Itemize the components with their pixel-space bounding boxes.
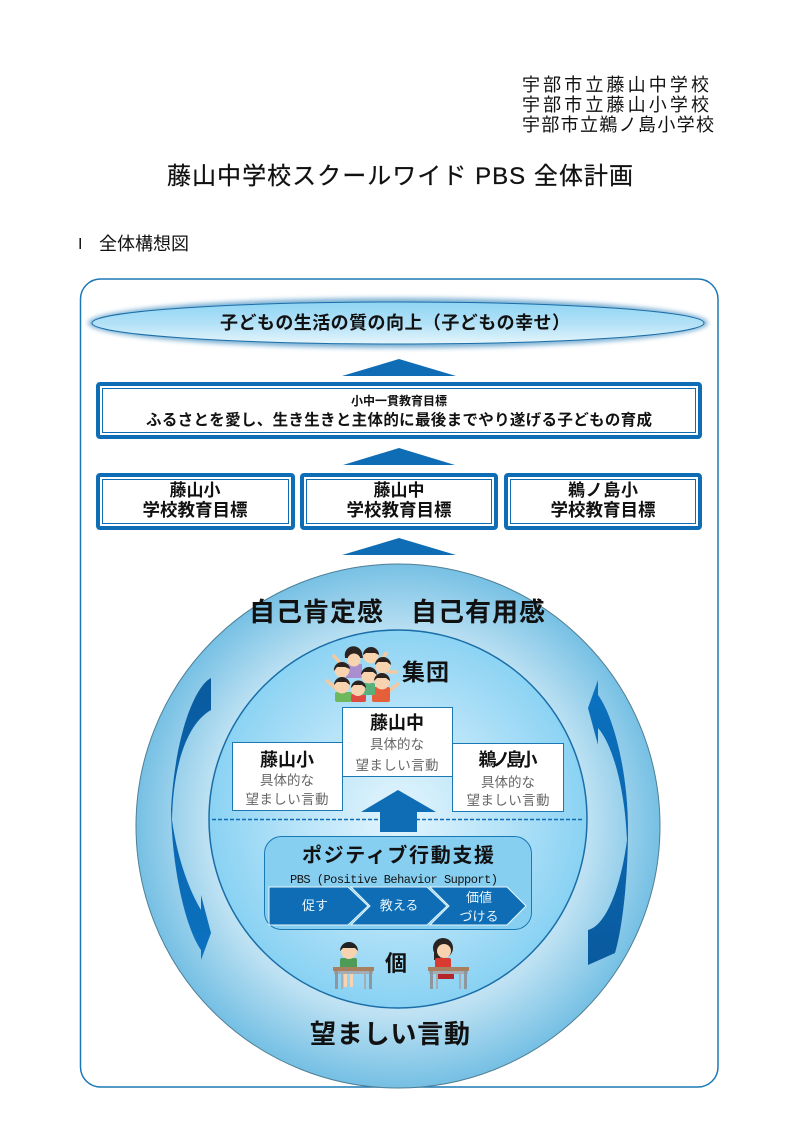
- chevron: value: 価値: [466, 890, 492, 905]
- icon: boy at desk: [333, 942, 374, 989]
- arms: [326, 640, 410, 690]
- section heading: 全体構想図: [99, 234, 189, 254]
- box: Fujiyama elementary behaviours: 藤山小: [260, 750, 314, 770]
- box: Fujiyama elementary goal: 藤山小: [170, 481, 220, 500]
- title: 藤山中学校スクールワイド PBS 全体計画: [167, 163, 633, 190]
- box: Unoshima elementary behaviours: 具体的な: [481, 775, 535, 790]
- school names: [522, 75, 714, 135]
- chevron: teach: [351, 887, 447, 925]
- icon: group of children: [326, 640, 410, 702]
- arrow: up 2: [343, 448, 455, 465]
- heading: desirable behaviour: 望ましい言動: [310, 1019, 470, 1049]
- back row: [346, 664, 362, 678]
- box: Fujiyama junior high behaviours: 藤山中: [370, 713, 424, 733]
- box: Unoshima elementary goal: 鵜ノ島小: [568, 481, 638, 500]
- arrow: up 3: [342, 538, 456, 555]
- panel: positive behaviour support: [264, 836, 532, 930]
- school names: 宇部市立鵜ノ島小学校: [522, 115, 714, 135]
- chevron: value: [430, 887, 526, 925]
- box: shared goal: ふるさとを愛し、生き生きと主体的に最後までやり遂げる子どもの育成: [146, 410, 652, 429]
- section heading: I: [78, 236, 82, 253]
- box: Unoshima elementary goal: [506, 475, 700, 528]
- inner circle: [209, 630, 587, 1008]
- box: shared goal: [98, 384, 700, 437]
- box: Unoshima elementary behaviours: 鵜ノ島小: [478, 750, 538, 770]
- chevron: teach: 教える: [380, 898, 418, 913]
- banner: quality of life: 子どもの生活の質の向上（子どもの幸せ）: [220, 313, 570, 333]
- arrow: big up: [361, 790, 436, 832]
- label: individual: 個: [385, 951, 407, 976]
- box: Fujiyama junior high behaviours: 望ましい言動: [356, 758, 438, 773]
- box: Fujiyama elementary behaviours: [232, 742, 342, 810]
- label: group: 集団: [402, 659, 449, 685]
- box: Unoshima elementary goal: 学校教育目標: [550, 500, 656, 520]
- box: Fujiyama elementary goal: [98, 475, 293, 528]
- box: Fujiyama junior high goal: 学校教育目標: [346, 500, 452, 520]
- box: Fujiyama elementary goal: 学校教育目標: [142, 500, 248, 520]
- school names: 宇部市立藤山中学校: [522, 75, 709, 95]
- arrow: right cycle: [588, 680, 628, 965]
- front row heads: [362, 668, 376, 684]
- box: Fujiyama junior high behaviours: 具体的な: [370, 737, 424, 752]
- front row bodies: [335, 692, 352, 702]
- panel: positive behaviour support: ポジティブ行動支援: [302, 843, 494, 867]
- icon: girl at desk: [428, 938, 469, 989]
- box: Fujiyama elementary behaviours: 具体的な: [260, 773, 314, 788]
- chevron: promote: 促す: [302, 898, 328, 913]
- outer circle: [136, 564, 660, 1088]
- dashed divider: [212, 818, 584, 820]
- panel: positive behaviour support: PBS (Positive Behavior Support): [290, 873, 498, 887]
- box: Fujiyama junior high goal: 藤山中: [374, 481, 424, 500]
- heading: self-esteem: 自己肯定感 自己有用感: [249, 597, 545, 627]
- box: Fujiyama elementary behaviours: 望ましい言動: [246, 792, 328, 807]
- box: Unoshima elementary behaviours: [452, 744, 564, 812]
- banner: quality of life: [88, 298, 708, 348]
- arrow: up 1: [342, 359, 456, 376]
- arrow: left cycle: [171, 678, 211, 960]
- chevron: value: づける: [459, 909, 499, 924]
- box: shared goal: 小中一貫教育目標: [351, 393, 447, 408]
- box: Fujiyama junior high behaviours: [342, 708, 452, 776]
- box: Unoshima elementary behaviours: 望ましい言動: [466, 793, 550, 808]
- panel: overall frame: [80, 279, 718, 1087]
- school names: 宇部市立藤山小学校: [522, 95, 709, 115]
- chevron: promote: [269, 887, 368, 925]
- box: Fujiyama junior high goal: [302, 475, 496, 528]
